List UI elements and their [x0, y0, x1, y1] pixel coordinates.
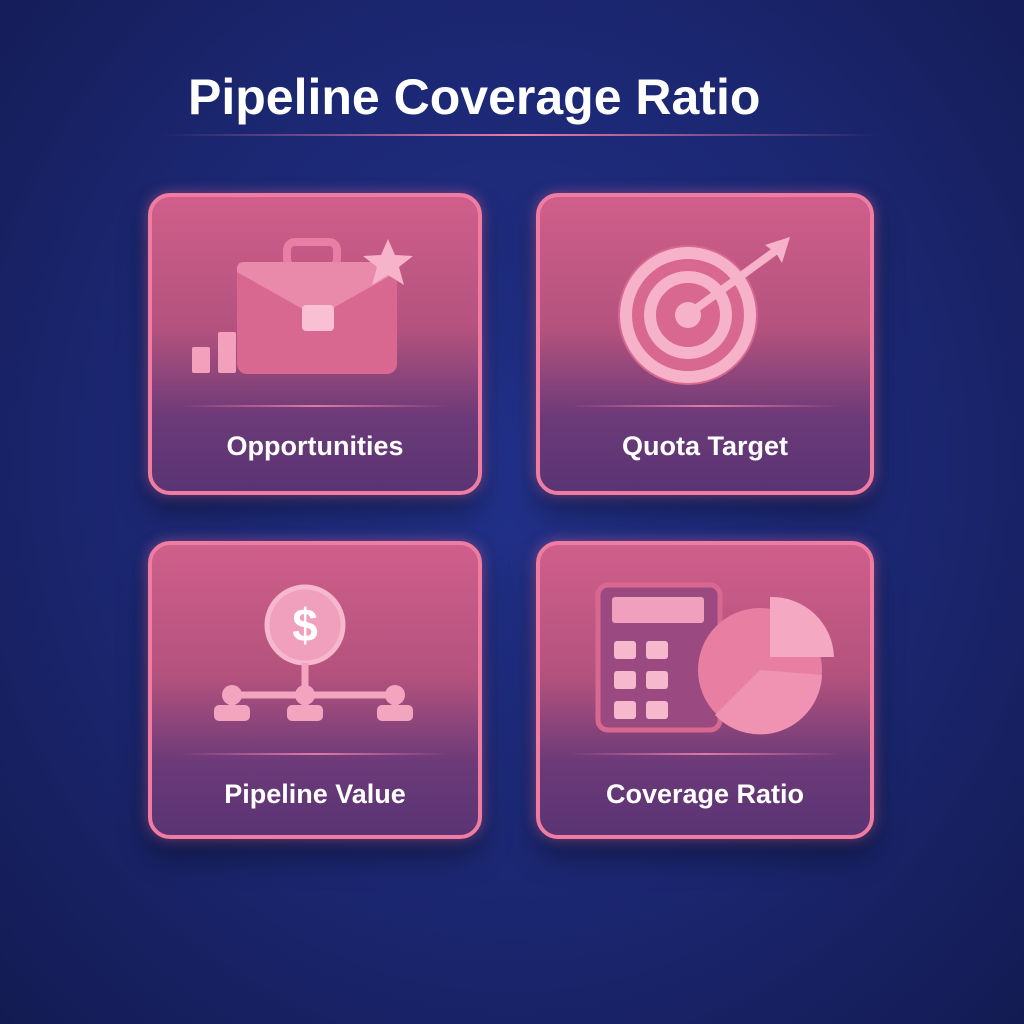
title: Pipeline Coverage Ratio — [188, 69, 760, 125]
icon: calculator and pie chart — [596, 582, 834, 734]
icon: target with arrow — [618, 237, 790, 385]
label: opportunities: Opportunities — [226, 431, 404, 461]
panel: quota target — [536, 193, 874, 495]
icon: dollar coin with network — [214, 584, 413, 721]
label: quota target: Quota Target — [622, 431, 788, 461]
icon: briefcase with star and bars — [192, 238, 413, 374]
panel: coverage ratio — [536, 541, 874, 839]
panel: opportunities — [148, 193, 482, 495]
panel: pipeline value — [148, 541, 482, 839]
label: coverage ratio: Coverage Ratio — [606, 779, 804, 809]
icon: dollar coin with network: $ — [292, 599, 318, 651]
label: pipeline value: Pipeline Value — [224, 779, 406, 809]
